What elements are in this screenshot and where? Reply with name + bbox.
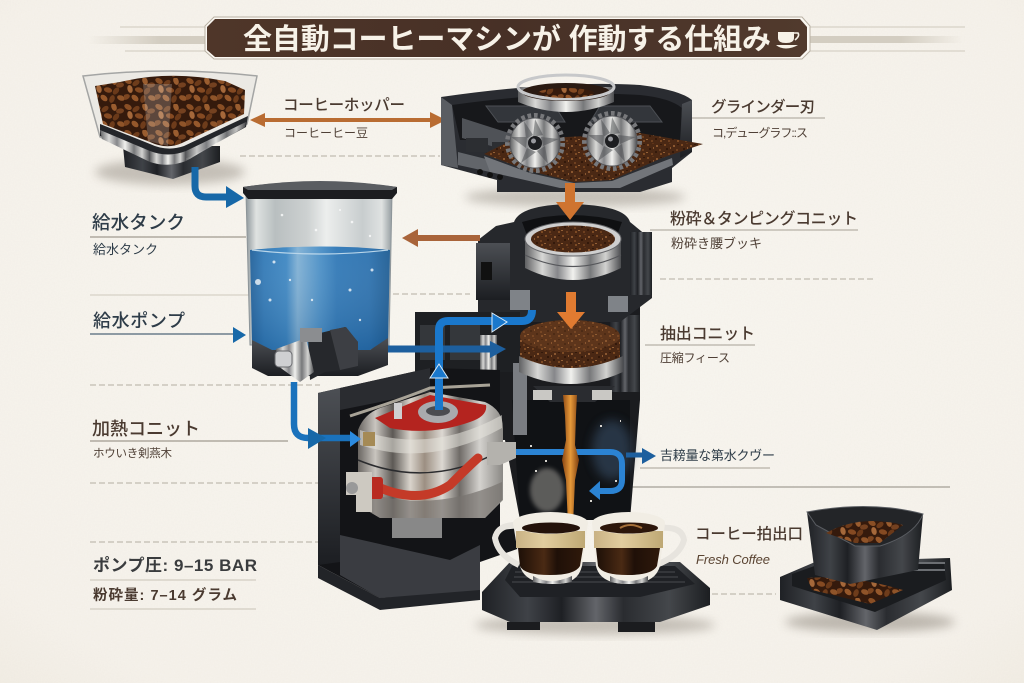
label: coffee spout: コーヒー拍出口 <box>695 525 803 543</box>
label: water pump <box>90 311 246 343</box>
pipe: pump to brew <box>388 341 506 358</box>
component: tamping unit <box>476 204 652 322</box>
component: water tank <box>243 181 397 376</box>
component: coffee hopper <box>83 71 257 185</box>
boiler red top <box>375 395 486 431</box>
label: tamping unit: 粉砕き腰ブッキ <box>671 236 762 251</box>
component: boiler <box>346 385 516 538</box>
arrow: hopper double arrow <box>250 112 446 128</box>
label: coffee spout <box>695 525 803 567</box>
label: water pump: 給水ポンプ <box>93 311 185 331</box>
component: bean box and tray <box>780 506 955 632</box>
pipe: flow to cups <box>516 448 656 500</box>
title banner <box>88 17 965 59</box>
cup: left <box>495 512 588 584</box>
tray <box>780 558 952 630</box>
ground coffee bed <box>484 133 703 182</box>
component: brew unit <box>519 320 623 402</box>
spec: pump pressure: ポンプ圧: 9–15 BAR <box>93 555 257 575</box>
label: brew unit: 抽出コニット <box>660 325 755 343</box>
coffee stream <box>562 395 579 525</box>
burr gears <box>508 114 639 170</box>
label: water tank: 給水タンク <box>93 242 158 257</box>
tank base <box>252 338 388 376</box>
tank lid <box>243 182 397 199</box>
label: coffee spout: Fresh Coffee <box>696 552 770 567</box>
red heating hose <box>378 458 478 496</box>
component: coffee cups <box>495 512 684 584</box>
blue water pipes <box>195 167 656 500</box>
valve block <box>346 472 372 512</box>
label: brew unit <box>660 325 755 365</box>
spec: coffee dose: 粉砕量: 7–14 グラム <box>93 586 237 604</box>
cup: right <box>592 512 684 584</box>
label: heating unit <box>90 419 288 460</box>
arrow: hopper to tank <box>195 167 244 208</box>
tamper ring <box>525 222 621 280</box>
title text: 全自動コーヒーマシンが 作動する仕組み <box>243 22 771 56</box>
label: grinder <box>711 97 815 140</box>
label: coffee hopper: コーヒーホッパー <box>283 96 405 114</box>
label: brew unit: 圧縮フィース <box>660 351 730 365</box>
label: water tank <box>90 212 246 257</box>
water <box>250 246 390 350</box>
label: tamping unit: 粉砕＆タンピングコニット <box>670 210 858 228</box>
pipe: tank to boiler <box>294 382 361 449</box>
label: heating unit: ホウいき剣燕木 <box>93 447 172 460</box>
steam and splatter <box>525 420 632 512</box>
label: coffee hopper <box>283 96 405 140</box>
component: pump <box>275 327 358 382</box>
icon: coffee cup <box>776 32 799 48</box>
top feed ring <box>518 75 614 112</box>
label: heating unit: 加熱コニット <box>92 419 200 439</box>
component: grinder <box>441 75 703 207</box>
label: coffee hopper: コーヒーヒー豆 <box>284 126 368 140</box>
label: water tank: 給水タンク <box>92 212 185 233</box>
component: drip tray <box>475 562 715 635</box>
base foot <box>392 518 442 538</box>
metal ring <box>519 356 623 384</box>
panel: decorative rules <box>90 118 950 594</box>
label: grinder: グラインダー刃 <box>711 97 815 116</box>
arrow: brown return arrow <box>402 229 480 247</box>
coffee beans <box>95 76 245 146</box>
label: water flow: 吉耪量な第水クヴー <box>660 448 775 463</box>
arrow: tamper to brew unit <box>557 292 585 329</box>
label: grinder: コ,デューグラフ::ス <box>712 125 808 140</box>
arrow: pump pointer <box>233 327 246 343</box>
side connector <box>487 442 516 465</box>
cup box <box>807 506 923 584</box>
pipe: boiler to brew <box>430 310 532 410</box>
label: tamping unit <box>670 210 858 251</box>
component: boiler frame <box>318 312 527 610</box>
arrow: grinder to tamper <box>556 183 584 220</box>
machine body column <box>498 290 640 520</box>
